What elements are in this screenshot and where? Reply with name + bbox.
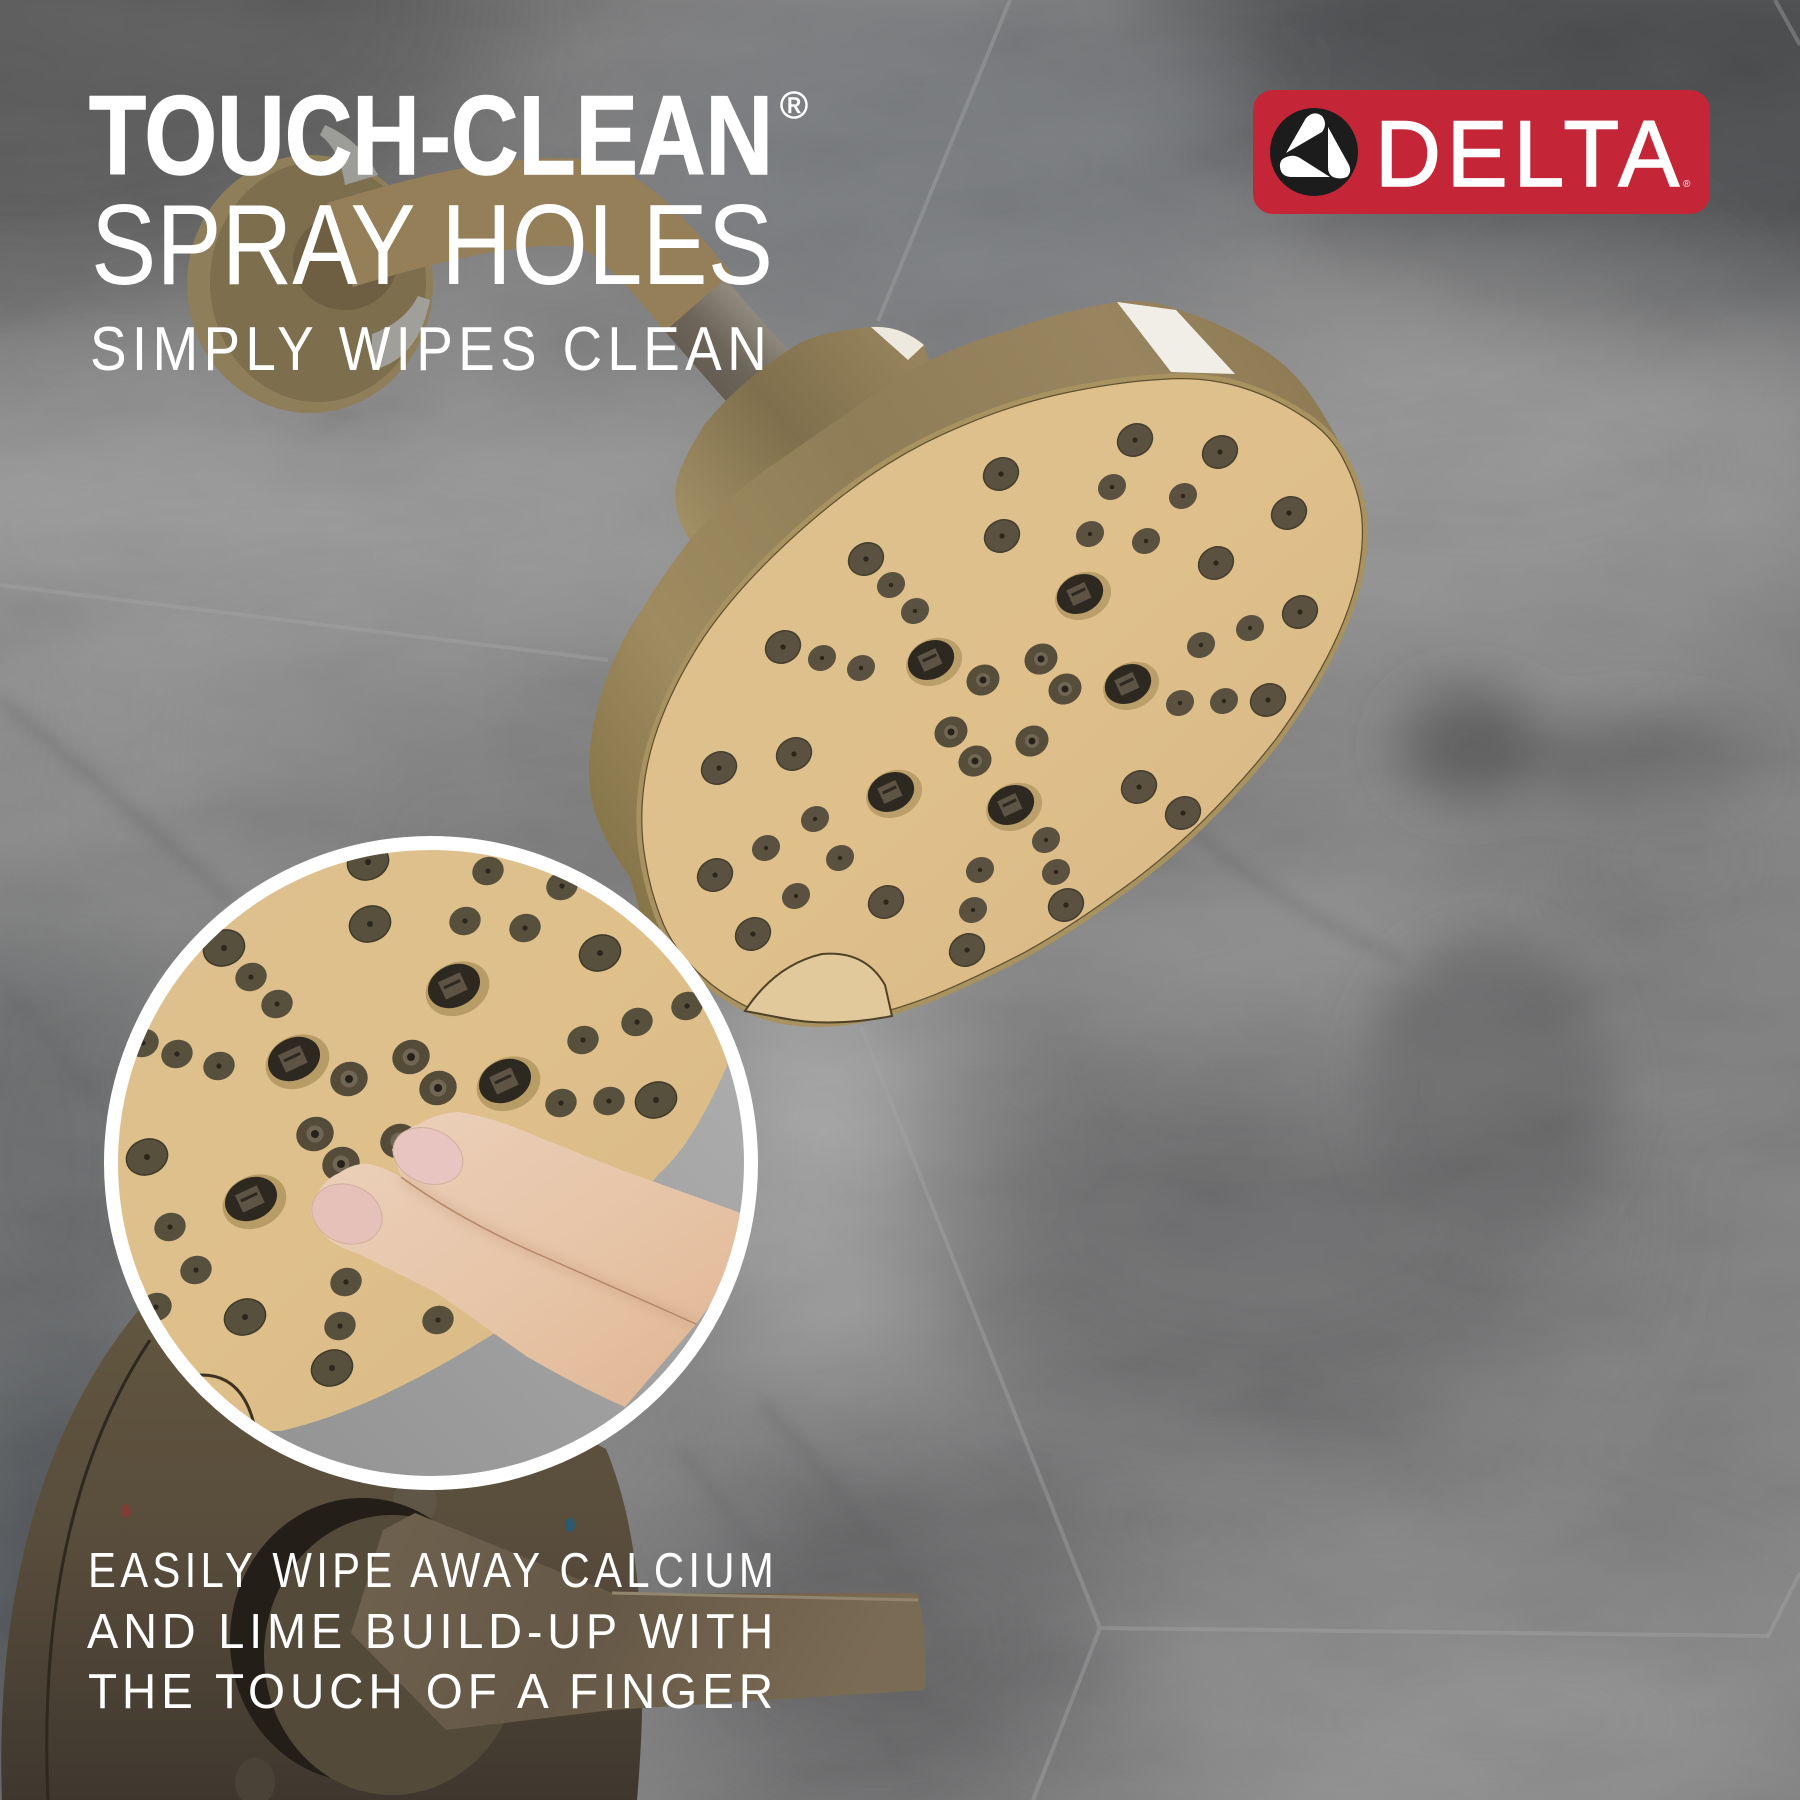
arm pipe <box>695 305 800 425</box>
face rim <box>642 379 1362 1021</box>
body specular highlight <box>1117 302 1235 374</box>
fingers <box>303 1112 741 1407</box>
title: Touch-Clean Spray Holes <box>89 73 808 384</box>
caption: THE TOUCH OF A FINGER <box>88 1665 778 1719</box>
valve plate <box>1 1290 642 1800</box>
caption: AND LIME BUILD-UP WITH <box>87 1605 778 1659</box>
face rim groove <box>642 379 1362 1021</box>
plate inner edge <box>47 1340 150 1800</box>
hot indicator dot <box>121 1504 131 1518</box>
bottom screw <box>235 1758 275 1800</box>
top screw <box>393 1478 437 1526</box>
wordmark: DELTA <box>1375 101 1685 206</box>
registered mark: ® <box>780 85 808 127</box>
nail lower <box>311 1184 383 1244</box>
neck cylinder <box>675 327 950 540</box>
heading line 2: SPRAY HOLES <box>91 182 773 309</box>
heading line 1: TOUCH-CLEAN <box>89 73 773 198</box>
tub and shower valve trim <box>1 1290 925 1800</box>
head body <box>589 301 1358 950</box>
white ring <box>111 843 751 1483</box>
wall flange <box>187 125 433 413</box>
zoomed spray face <box>118 850 728 1431</box>
logo registered mark: ® <box>1683 179 1691 190</box>
red badge <box>1253 90 1710 214</box>
inset circle: finger wiping spray face <box>90 820 780 1500</box>
hub body <box>264 1515 520 1795</box>
inset background <box>269 1064 744 1476</box>
Delta logo <box>1253 90 1710 214</box>
cold indicator dot <box>565 1518 575 1532</box>
wall flange and shower arm <box>187 125 800 425</box>
caption <box>87 1544 778 1719</box>
caption: EASILY WIPE AWAY CALCIUM <box>88 1544 778 1598</box>
notch <box>200 1374 255 1422</box>
neck highlight <box>871 327 924 360</box>
subheading: SIMPLY WIPES CLEAN <box>90 315 772 384</box>
notch <box>745 954 892 1023</box>
spray holes <box>692 418 1323 972</box>
shower head <box>589 301 1362 1023</box>
spray face <box>642 379 1362 1021</box>
handle ridge <box>612 1593 918 1600</box>
nail upper <box>392 1127 464 1185</box>
emblem <box>1270 108 1358 196</box>
valve hub <box>230 1498 494 1782</box>
handle <box>351 1513 925 1730</box>
shower arm <box>340 202 700 305</box>
zoomed spray holes <box>121 838 707 1392</box>
